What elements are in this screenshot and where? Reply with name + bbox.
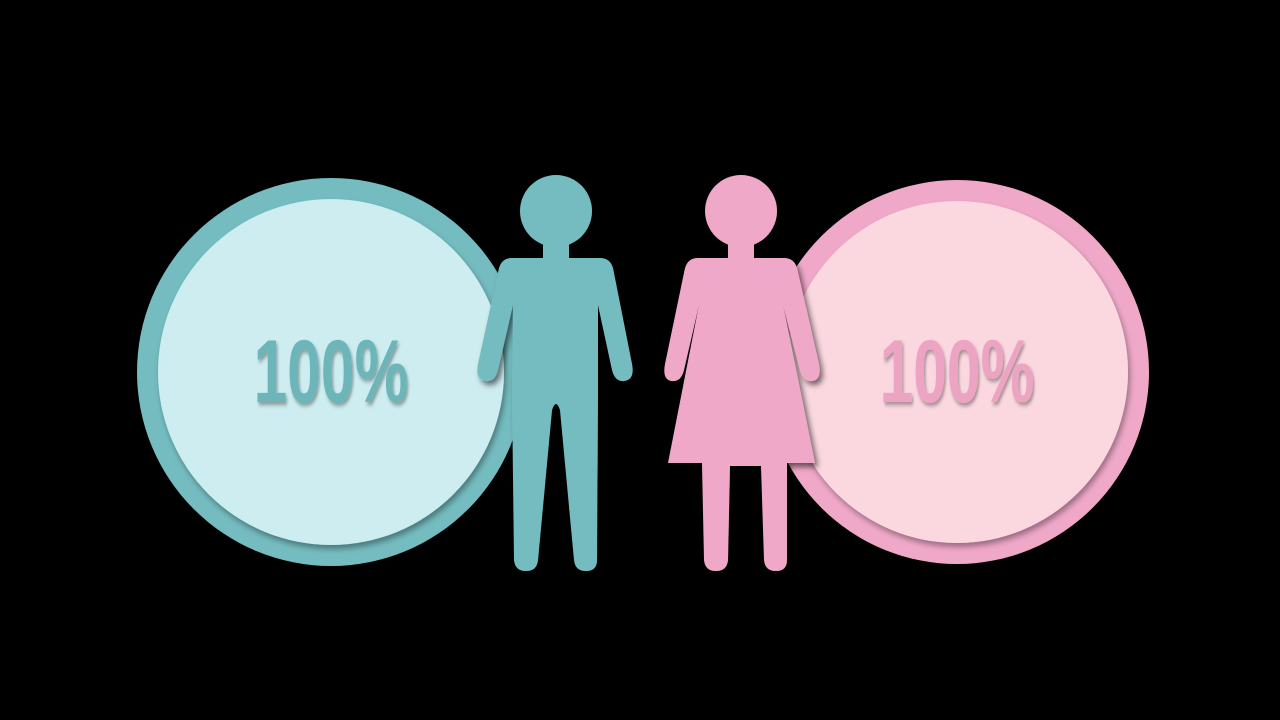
icon: man figure bbox=[477, 175, 633, 571]
text: male percentage: 100% bbox=[254, 322, 408, 422]
icon: woman figure bbox=[664, 175, 820, 571]
panel: female circle bbox=[765, 180, 1149, 564]
text: female percentage: 100% bbox=[880, 322, 1034, 422]
panel: male circle bbox=[137, 178, 525, 566]
